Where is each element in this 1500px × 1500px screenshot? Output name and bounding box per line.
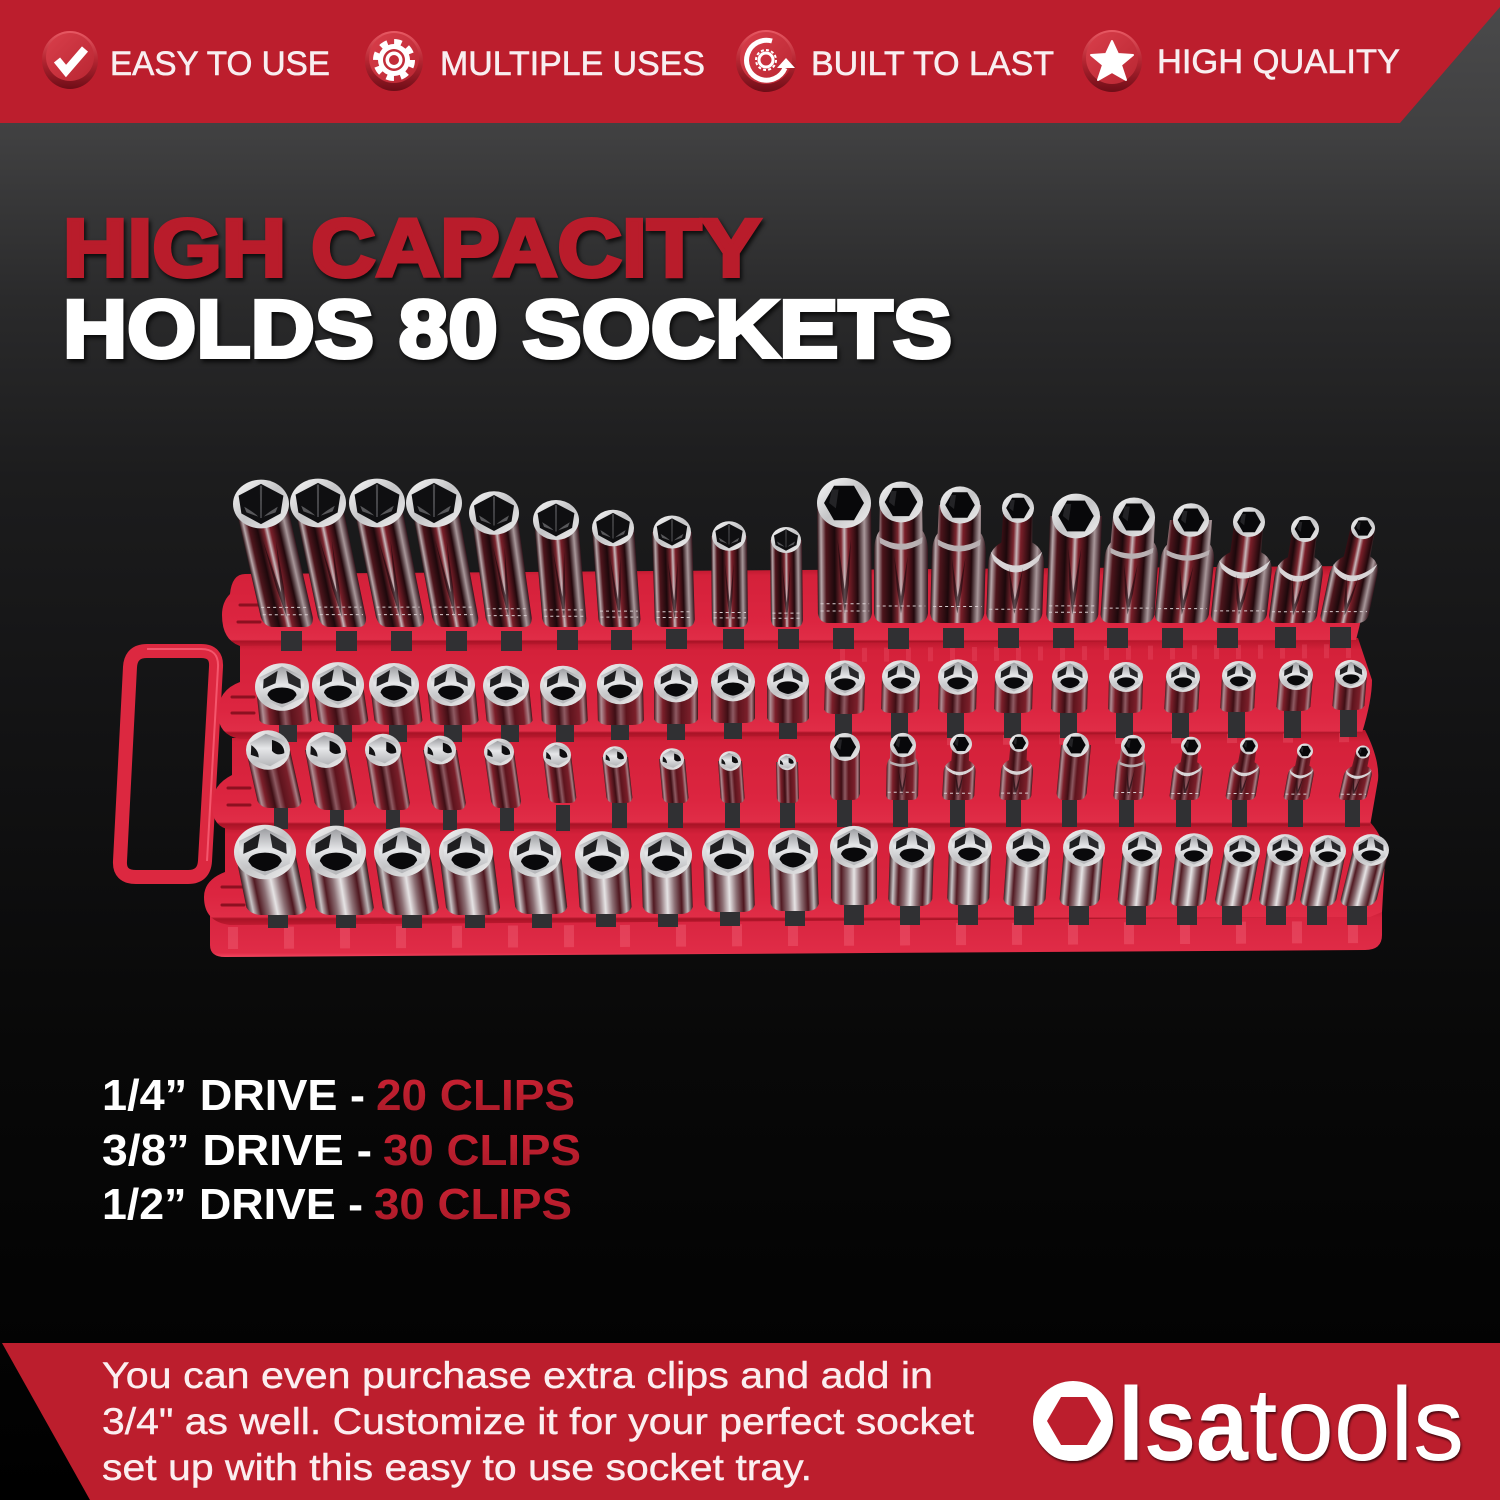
socket tray product [120,478,1389,957]
tray rail 2 [218,638,1372,739]
line: 1/4 drive: 20 CLIPS [376,1071,575,1120]
tray rail 4 with front lip [204,822,1385,957]
logo: O [1032,1361,1113,1484]
title [63,203,952,375]
tray rail 1 [222,566,1366,646]
feature: easy to use [42,31,330,89]
footer banner [2,1343,1500,1500]
header banner [0,0,1500,123]
line: 1/2 drive: 1/2” DRIVE - [102,1180,363,1229]
tray handle [120,649,218,877]
title line: holds 80 sockets: HOLDS 80 SOCKETS [63,284,952,375]
line: 3/8 drive: 30 CLIPS [383,1126,581,1175]
clips: row 3 [274,800,1360,831]
feature: built to last [736,30,1054,92]
clips: row 4 [268,898,1367,928]
feature: built to last: BUILT TO LAST [811,45,1054,83]
logo [1032,1361,1464,1484]
logo: tools [1249,1367,1464,1483]
sockets row 4: large sockets [234,825,1389,915]
footer text: You can even purchase extra clips and add in [102,1355,933,1396]
sockets row 2: shallow sockets [255,659,1367,725]
line: 1/4 drive: 1/4” DRIVE - [102,1071,365,1120]
line: 1/2 drive: 30 CLIPS [374,1180,572,1229]
logo: lsa [1118,1367,1249,1483]
sockets row 3: small sockets [246,730,1377,810]
line: 3/8 drive [102,1126,581,1175]
feature: multiple uses: MULTIPLE USES [440,45,705,83]
sockets row 1: deep sockets [233,478,1387,627]
feature: easy to use: EASY TO USE [110,45,330,83]
drive size list [102,1071,581,1229]
clips: row 2 [279,708,1357,742]
feature: high quality: HIGH QUALITY [1157,43,1400,81]
line: 1/4 drive [102,1071,575,1120]
line: 1/2 drive [102,1180,572,1229]
clips: row 1 [281,627,1351,651]
footer text: 3/4" as well. Customize it for your perfect socket [102,1401,975,1442]
feature: high quality [1082,30,1400,92]
line: 3/8 drive: 3/8” DRIVE - [102,1126,372,1175]
footer text [102,1355,975,1488]
footer text: set up with this easy to use socket tray. [102,1447,812,1488]
feature: multiple uses [365,31,705,91]
tray rail 3 [212,730,1378,830]
title line: high capacity: HIGH CAPACITY [63,203,761,294]
